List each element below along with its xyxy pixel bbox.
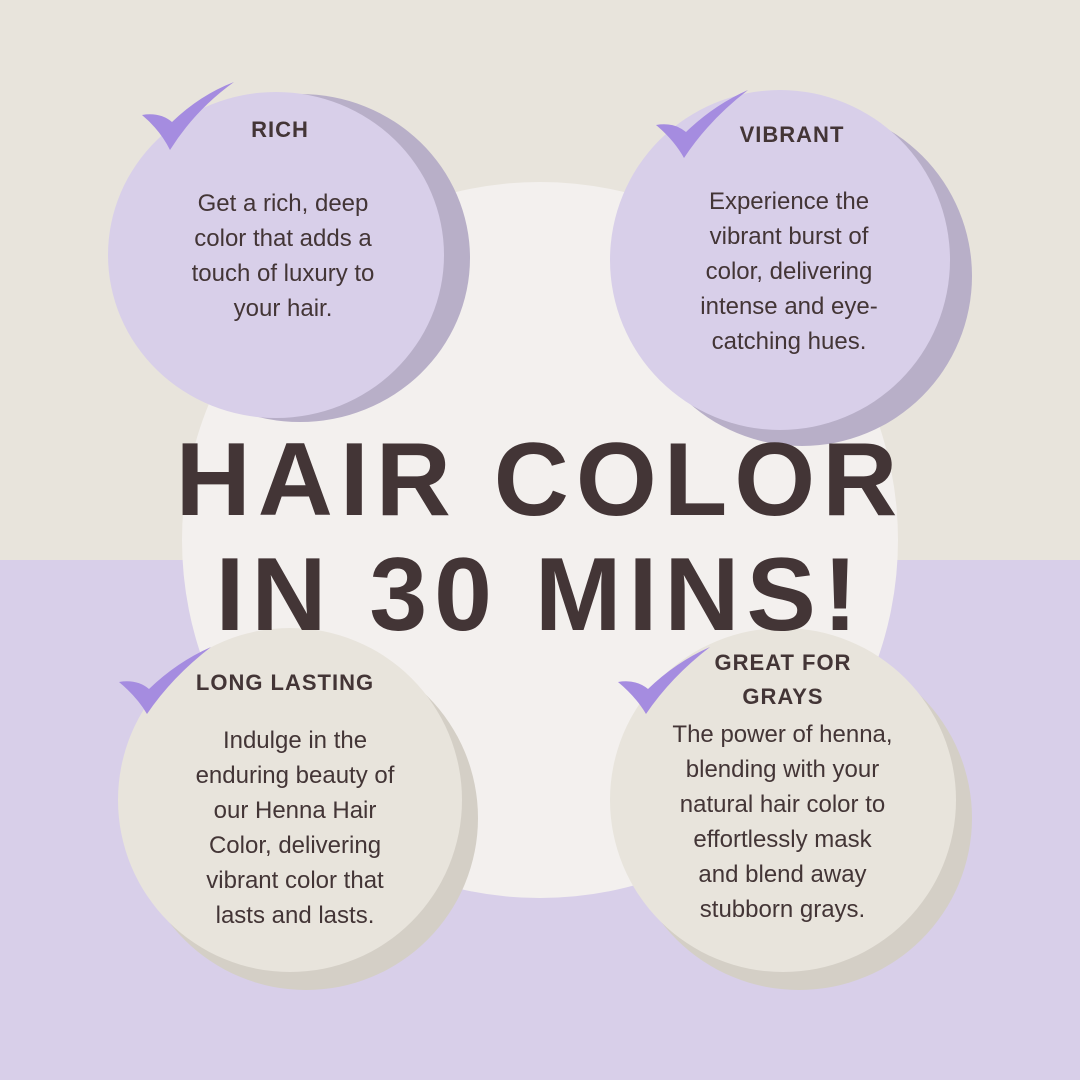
panel: long lasting: [118, 628, 478, 990]
heading: great for grays: GREAT FOR: [715, 650, 851, 675]
text: rich: Get a rich, deep: [198, 190, 368, 217]
heading: long lasting: LONG LASTING: [196, 670, 374, 695]
text: long lasting: [196, 727, 394, 929]
heading: great for grays: GRAYS: [742, 684, 824, 709]
icon: check vibrant: [656, 90, 748, 158]
central circle: [182, 182, 898, 898]
text: long lasting: lasts and lasts.: [216, 902, 374, 929]
text: great for grays: The power of henna,: [672, 721, 893, 748]
text: vibrant: color, delivering: [706, 258, 872, 285]
panel: vibrant: [610, 90, 972, 446]
text: long lasting: Indulge in the: [223, 727, 367, 754]
text: vibrant: [700, 188, 878, 355]
icon: check grays: [618, 647, 710, 714]
text: long lasting: vibrant color that: [206, 867, 384, 894]
text: long lasting: Color, delivering: [209, 832, 381, 859]
text: vibrant: intense and eye-: [700, 293, 878, 320]
text: great for grays: natural hair color to: [680, 791, 885, 818]
panel: great for grays: [610, 628, 972, 990]
title: IN 30 MINS!: [215, 537, 865, 653]
heading: great for grays: [715, 650, 851, 709]
panel: rich: [108, 92, 470, 422]
text: great for grays: blending with your: [686, 756, 879, 783]
background top: [0, 0, 1080, 560]
heading: rich: RICH: [251, 117, 309, 142]
text: vibrant: Experience the: [709, 188, 869, 215]
text: long lasting: enduring beauty of: [196, 762, 394, 789]
text: rich: touch of luxury to: [192, 260, 374, 287]
text: great for grays: [672, 721, 893, 923]
text: rich: [192, 190, 374, 322]
text: great for grays: stubborn grays.: [700, 896, 865, 923]
text: rich: your hair.: [234, 295, 332, 322]
text: rich: color that adds a: [194, 225, 372, 252]
text: great for grays: and blend away: [698, 861, 867, 888]
text: long lasting: our Henna Hair: [214, 797, 376, 824]
text: great for grays: effortlessly mask: [693, 826, 872, 853]
text: vibrant: catching hues.: [712, 328, 866, 355]
title: HAIR COLOR: [176, 422, 904, 538]
icon: check rich: [142, 82, 234, 150]
icon: check long lasting: [119, 647, 211, 714]
title: [176, 422, 904, 653]
heading: vibrant: VIBRANT: [740, 122, 844, 147]
text: vibrant: vibrant burst of: [710, 223, 868, 250]
